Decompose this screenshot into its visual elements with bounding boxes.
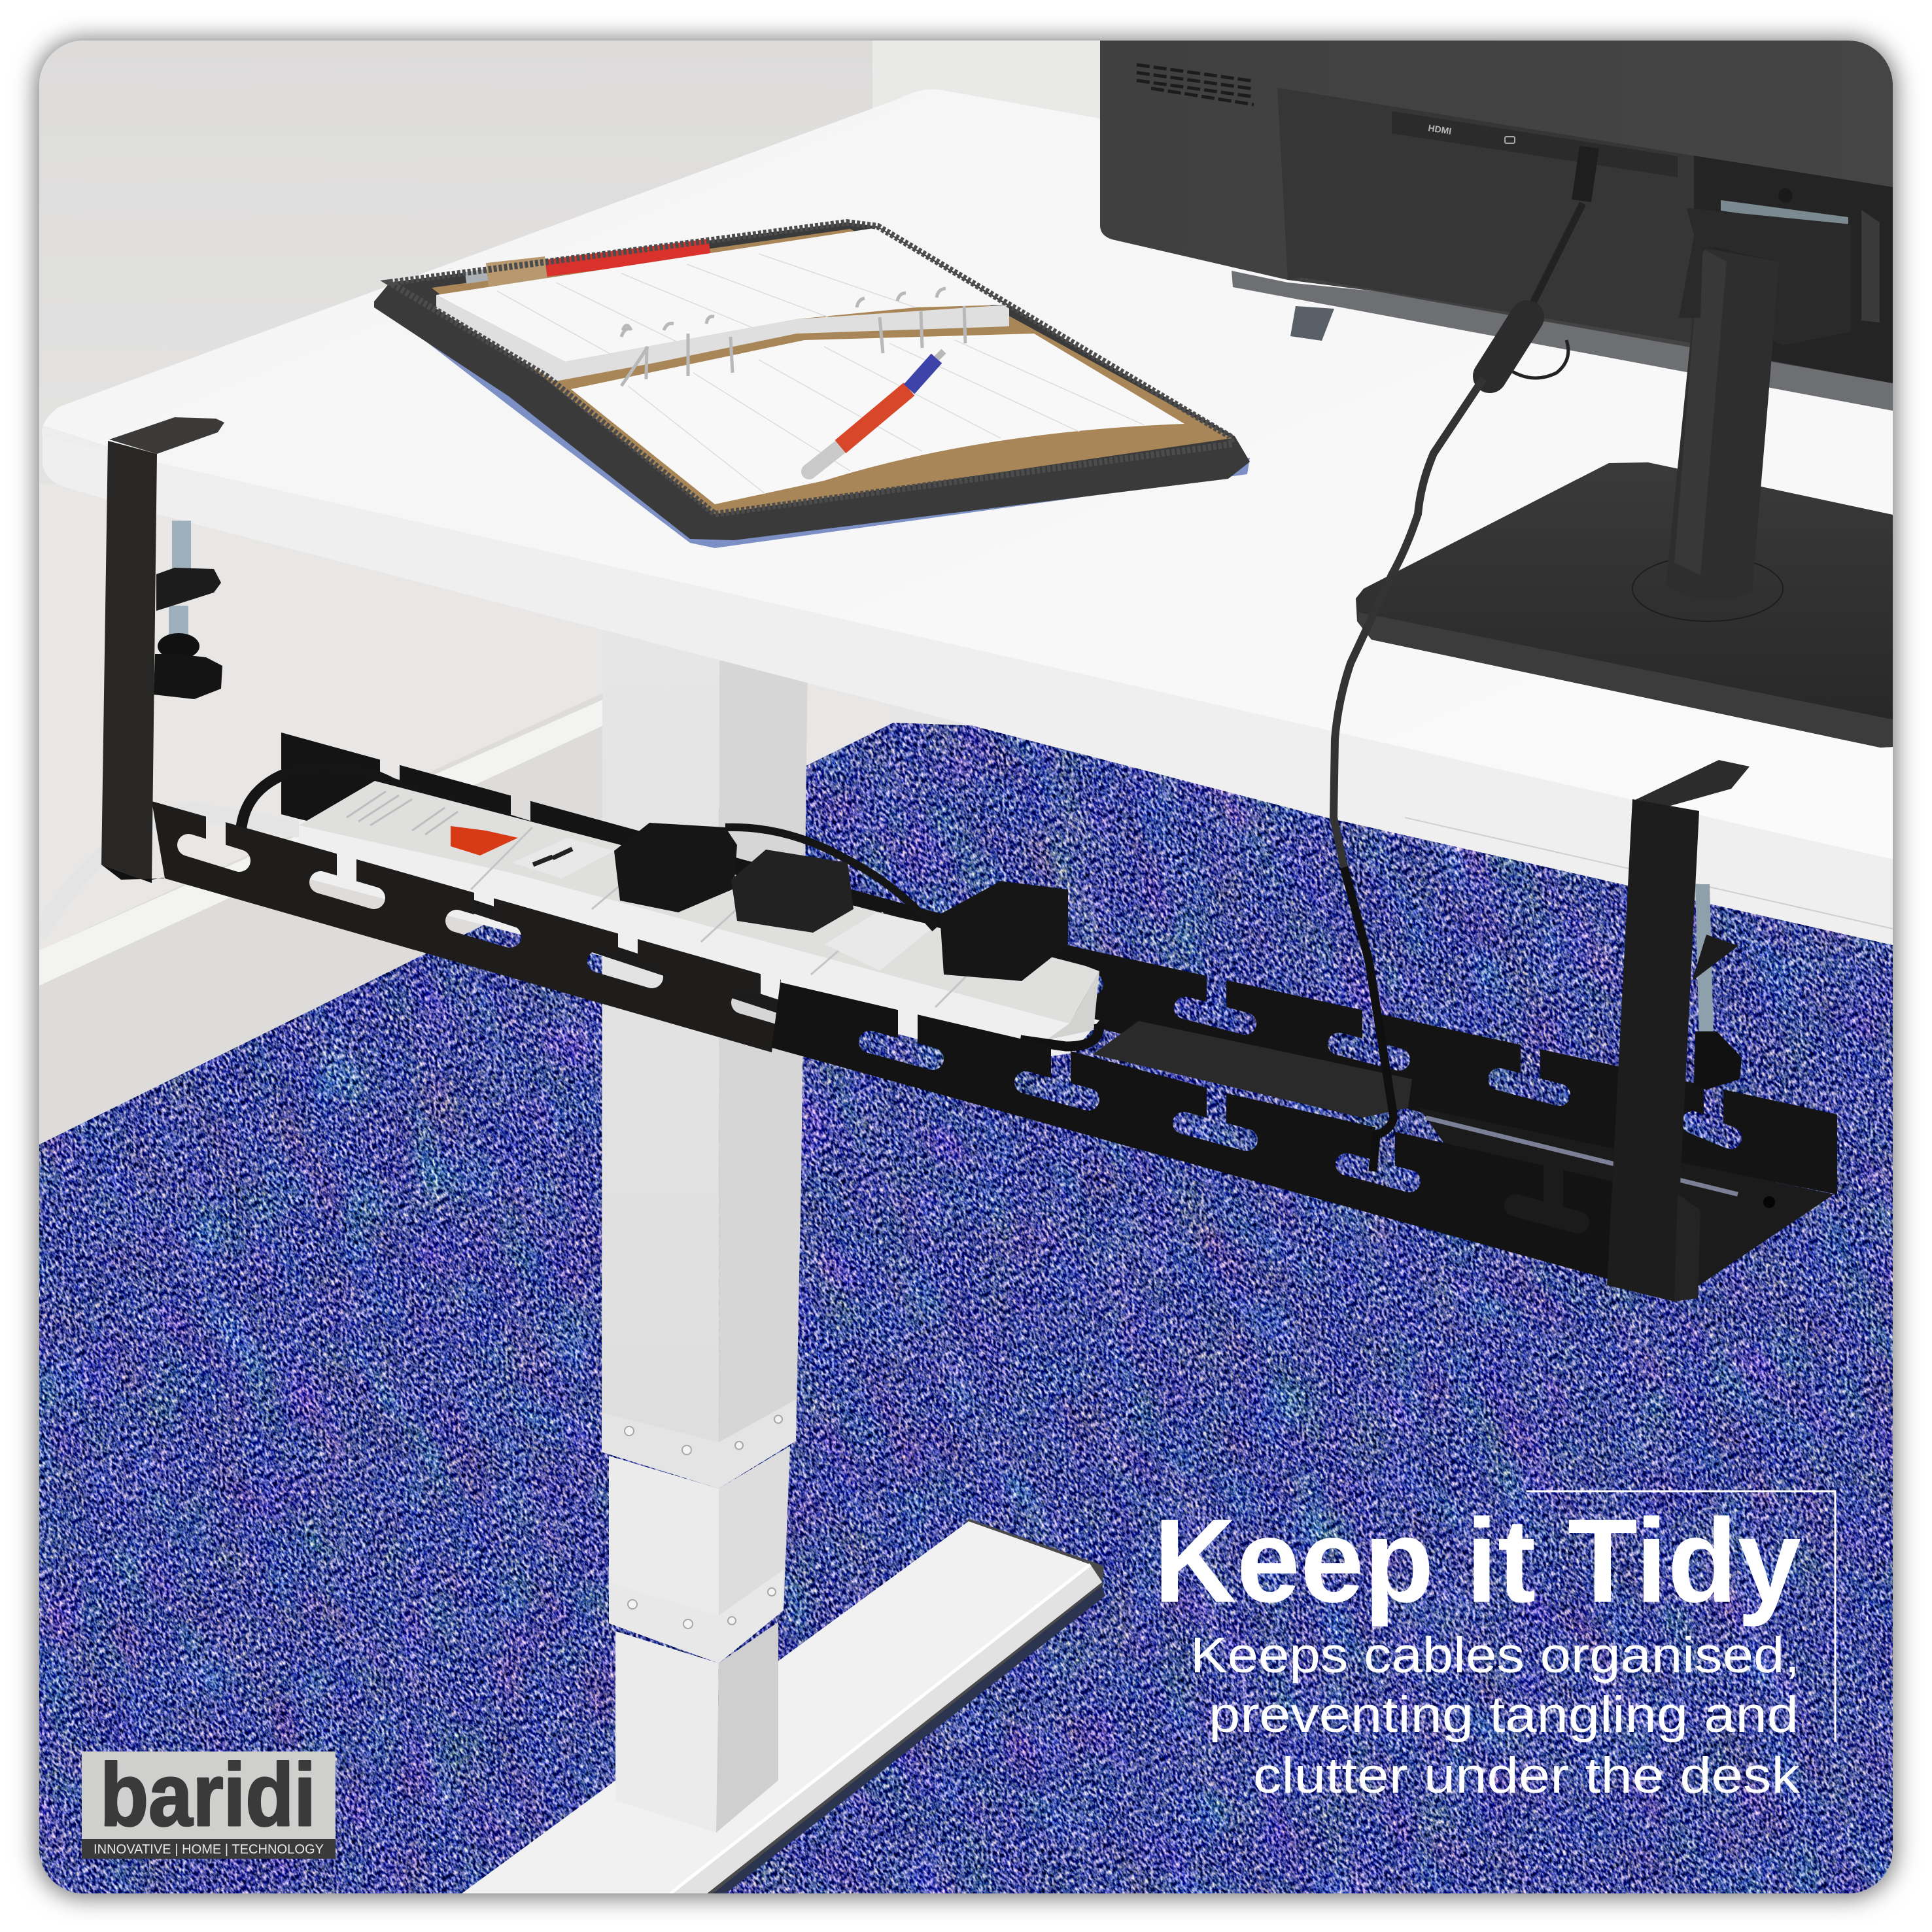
subhead line three: clutter under the desk bbox=[1253, 1748, 1801, 1804]
desk leg middle section bbox=[609, 1446, 790, 1663]
socket panel bbox=[825, 912, 935, 971]
extension lead black cable loop bbox=[241, 767, 543, 834]
left bracket bbox=[101, 417, 224, 883]
brown inner lining bbox=[432, 229, 1232, 514]
baridi logo bbox=[82, 1745, 336, 1859]
headline frame bbox=[1527, 1491, 1835, 1742]
upper page bbox=[436, 228, 1006, 362]
power strip bbox=[299, 781, 1099, 1063]
monitor lower silver bar bbox=[1232, 271, 1893, 411]
pen on page bbox=[809, 351, 944, 472]
monitor rear housing bbox=[1100, 41, 1893, 383]
page rule lines bbox=[497, 254, 1145, 494]
vents bbox=[1137, 65, 1254, 105]
port label bar bbox=[1392, 111, 1678, 177]
cable between plugs bbox=[725, 827, 935, 929]
desk foot bbox=[462, 1519, 1105, 1900]
lower page bbox=[571, 334, 1184, 504]
segment dividers bbox=[471, 827, 1001, 1007]
logo wordmark: baridi bbox=[100, 1745, 316, 1844]
cable tray back wall bbox=[281, 733, 1837, 1194]
headline: Keep it Tidy bbox=[1154, 1494, 1801, 1627]
subhead line one: Keeps cables organised, bbox=[1190, 1627, 1800, 1683]
right bracket screw and knob bbox=[1692, 884, 1742, 1090]
white mains cable bbox=[39, 811, 301, 935]
left bracket screw and knob bbox=[154, 521, 222, 699]
plug two bbox=[731, 850, 854, 933]
desk top bbox=[42, 89, 1893, 945]
port label bar: HDMI bbox=[1428, 122, 1452, 137]
notebook organiser bbox=[374, 222, 1250, 548]
headline text block bbox=[1154, 1491, 1835, 1804]
monitor stand base bbox=[1356, 462, 1893, 748]
grip ribs bbox=[347, 791, 458, 835]
strip side face bbox=[299, 819, 1099, 1063]
monitor stand column bbox=[1666, 247, 1779, 600]
strip top face bbox=[299, 781, 1099, 1024]
desk leg lower section bbox=[615, 1622, 778, 1833]
cable tray floor bbox=[1419, 1108, 1834, 1295]
monitor bbox=[1100, 41, 1893, 411]
tray front wall section one bbox=[152, 801, 781, 1052]
power brick bbox=[1093, 1021, 1412, 1118]
page block edges bbox=[436, 295, 1009, 381]
red switch bbox=[451, 826, 518, 855]
skirting board bbox=[39, 693, 602, 1164]
ring binder rings bbox=[621, 288, 965, 386]
plug one bbox=[614, 823, 737, 912]
small coil behind monitor bbox=[1504, 340, 1568, 378]
leg collars with bolts bbox=[602, 1400, 796, 1663]
plug three bbox=[940, 881, 1068, 981]
hanging cable lower part bbox=[1344, 867, 1394, 1171]
tray front wall section two bbox=[772, 982, 1674, 1298]
wall background bbox=[39, 41, 1100, 950]
USB panel bbox=[512, 838, 614, 878]
dark case bbox=[374, 222, 1250, 540]
recessed panel bbox=[1277, 88, 1694, 343]
strip end cable loop bbox=[1020, 1024, 1099, 1046]
red pen in pocket bbox=[466, 247, 710, 278]
logo tagline: INNOVATIVE | HOME | TECHNOLOGY bbox=[94, 1842, 324, 1857]
monitor mount bbox=[1679, 188, 1880, 345]
blue cover edge bbox=[374, 302, 1250, 548]
monitor foot bbox=[1290, 306, 1334, 341]
cables seen through tray slots bbox=[451, 899, 850, 1030]
right bracket bbox=[1607, 760, 1750, 1302]
monitor power cable bbox=[1334, 147, 1589, 867]
desk leg upper section bbox=[602, 615, 808, 1489]
subhead line two: preventing tangling and bbox=[1209, 1687, 1799, 1743]
case zipper bbox=[390, 222, 1232, 514]
carpet floor bbox=[39, 723, 1893, 1893]
